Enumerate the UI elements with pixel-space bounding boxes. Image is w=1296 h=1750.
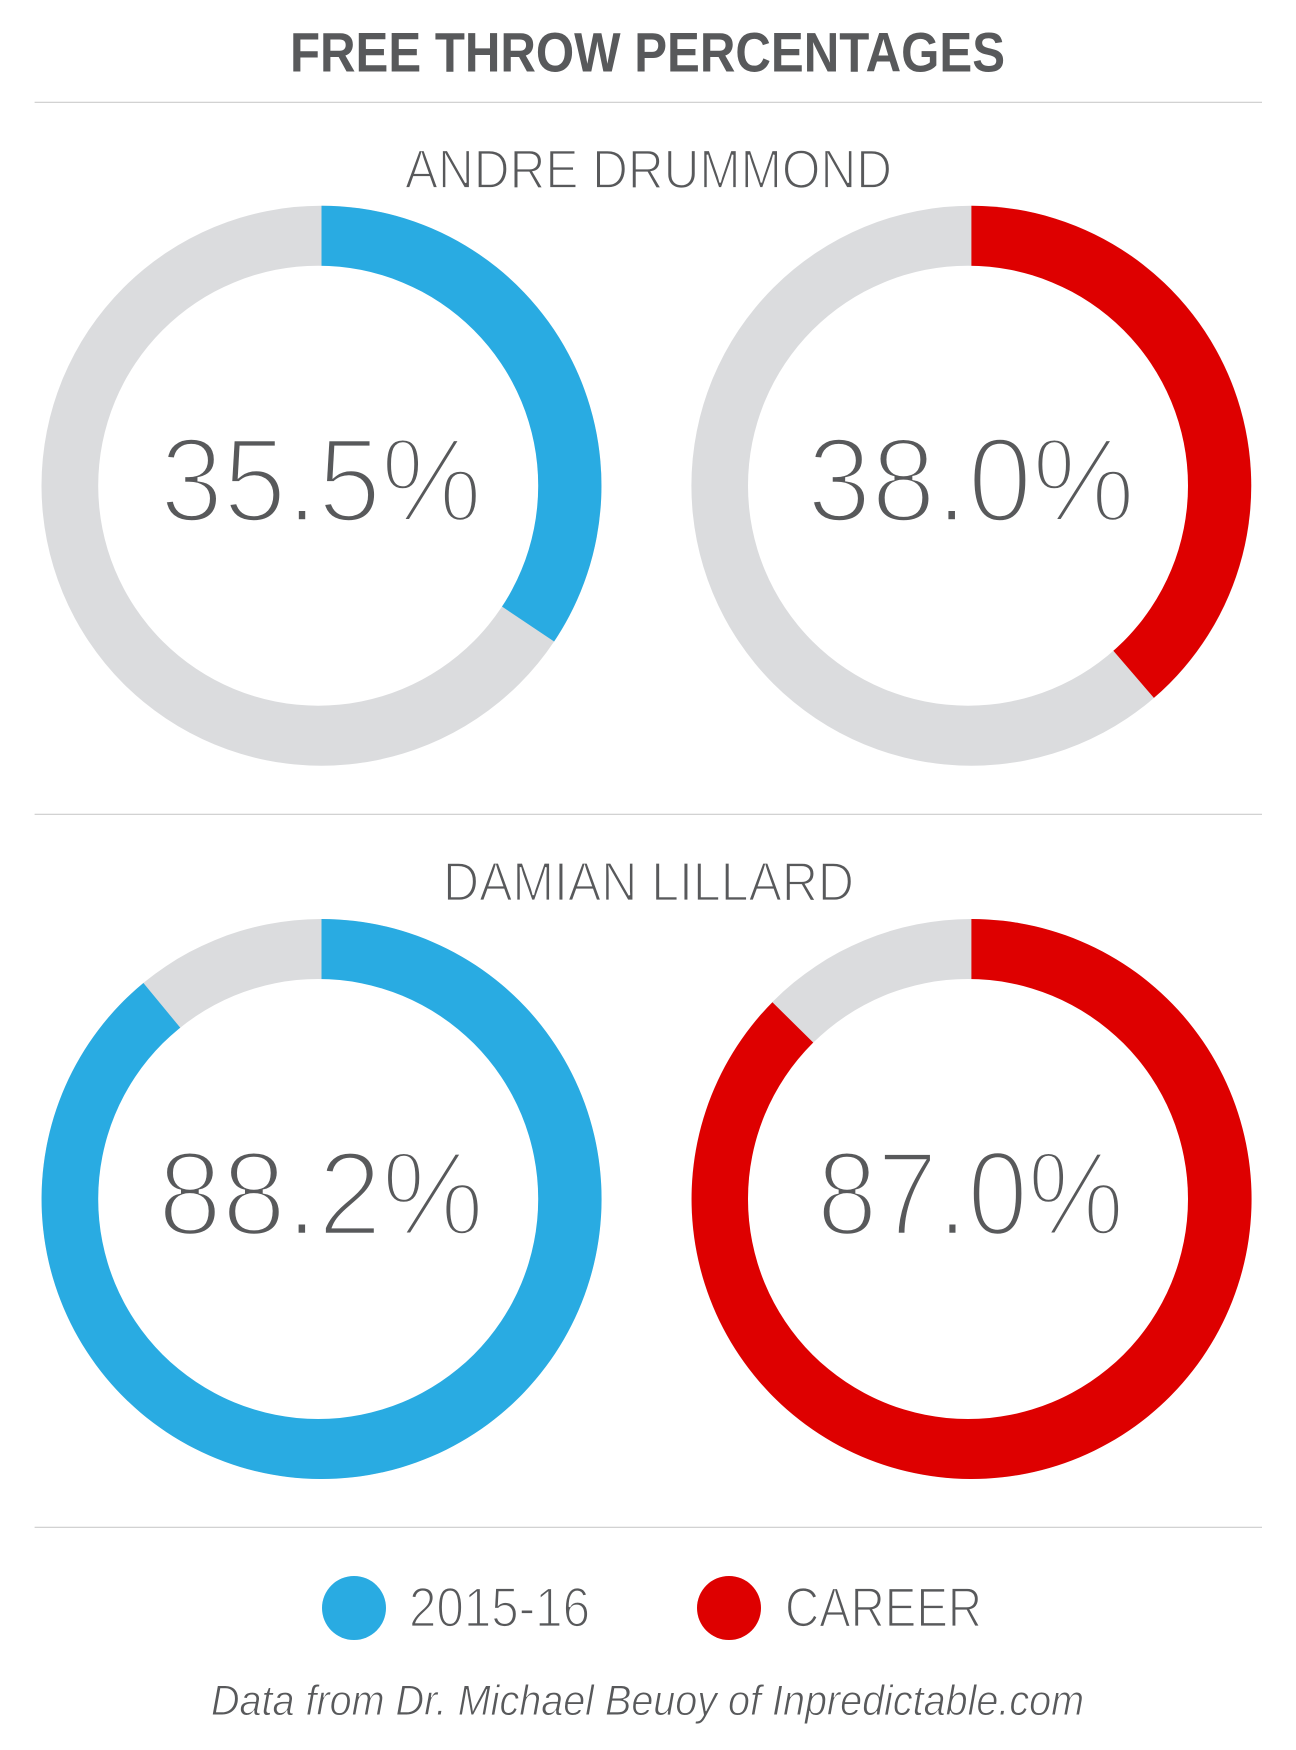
- player heading: Andre Drummond: ANDRE DRUMMOND: [405, 138, 892, 200]
- legend item: 2015-16: [322, 1576, 590, 1640]
- donut: Drummond 2015-16 35.5%: [42, 206, 602, 766]
- legend: [322, 1576, 982, 1640]
- donut: Lillard 2015-16 88.2%: 88.2%: [158, 1127, 484, 1261]
- donut: Lillard career 87.0%: 87.0%: [817, 1127, 1124, 1261]
- donut: Lillard 2015-16 88.2%: [42, 919, 602, 1479]
- donut: Drummond career 38.0%: 38.0%: [807, 413, 1135, 547]
- legend item: career: [697, 1576, 982, 1640]
- legend item: career: CAREER: [785, 1576, 982, 1639]
- source note: Data from Dr. Michael Beuoy of Inpredictable.com: [211, 1677, 1084, 1725]
- title: FREE THROW PERCENTAGES: [290, 20, 1005, 83]
- player heading: Damian Lillard: DAMIAN LILLARD: [443, 851, 854, 913]
- donut: Lillard career 87.0%: [691, 919, 1252, 1479]
- donut: Drummond 2015-16 35.5%: 35.5%: [160, 413, 482, 547]
- legend item: 2015-16: 2015-16: [409, 1576, 590, 1639]
- donut: Drummond career 38.0%: [691, 206, 1251, 766]
